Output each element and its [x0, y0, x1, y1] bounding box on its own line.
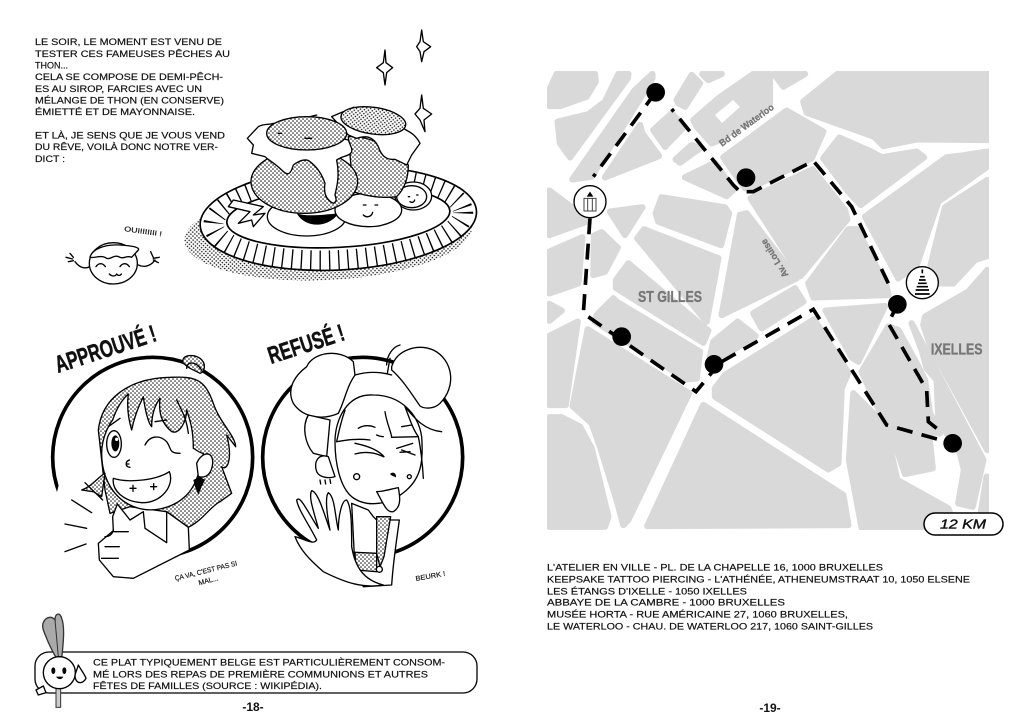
text block: intro: ES AU SIROP, FARCIES AVEC UN	[35, 84, 202, 94]
fringe line	[337, 437, 418, 442]
text block: addresses: KEEPSAKE TATTOO PIERCING - L'ATHÉNÉE, ATHENEUMSTRAAT 10, 1050 ELSENE	[547, 574, 970, 584]
white square building	[715, 100, 740, 123]
illustration: plate of stuffed peaches	[182, 30, 479, 287]
cucumber slices	[335, 182, 432, 227]
winking eye	[145, 437, 180, 453]
white gap for hand	[50, 480, 107, 560]
circle	[53, 357, 253, 557]
label: st gilles: ST GILLES	[638, 289, 702, 306]
text block: intro: DU RÊVE, VOILÀ DONC NOTRE VER-	[35, 142, 218, 152]
hair strands	[108, 400, 188, 433]
caption: ça va: MAL...	[198, 575, 219, 587]
icon: turnip mascot	[36, 614, 86, 707]
distance badge: 12 KM	[940, 516, 986, 532]
lower peach disc with black shadow	[267, 197, 346, 236]
text block: addresses	[547, 562, 970, 632]
side hair	[305, 415, 330, 457]
fingers	[102, 530, 128, 558]
callout: wikipedia note: CE PLAT TYPIQUEMENT BELGE EST PARTICULIÈREMENT CONSOM-	[93, 658, 445, 668]
text block: intro: LE SOIR, LE MOMENT EST VENU DE	[35, 37, 222, 47]
callout: wikipedia note: MÉ LORS DES REPAS DE PREMIÈRE COMMUNIONS ET AUTRES	[93, 670, 428, 680]
heading: refusé: REFUSÉ !	[264, 319, 348, 370]
suspender and shirt	[352, 503, 399, 587]
salad leaf	[228, 200, 265, 227]
text block: addresses: ABBAYE DE LA CAMBRE - 1000 BRUXELLES	[547, 598, 785, 608]
right peach	[332, 103, 420, 197]
neck and arm	[98, 504, 189, 578]
heading: approuvé: APPROUVÉ !	[51, 320, 160, 379]
text block: addresses: L'ATELIER EN VILLE - PL. DE LA CHAPELLE 16, 1000 BRUXELLES	[547, 562, 883, 572]
text block: addresses: LES ÉTANGS D'IXELLE - 1050 IXELLES	[547, 586, 747, 596]
small hair tuft	[82, 473, 105, 497]
face with bang spikes	[102, 394, 203, 510]
tongue	[377, 488, 400, 512]
icon: building marker	[574, 186, 606, 218]
map overlay	[574, 83, 982, 453]
caption: beurk: BEURK !	[415, 571, 446, 583]
map base blocks	[549, 73, 988, 528]
circle	[263, 357, 463, 557]
plate	[197, 159, 479, 277]
ear	[197, 454, 213, 477]
text block: intro: ET LÀ, JE SENS QUE JE VOUS VEND	[35, 130, 226, 140]
sparkles	[377, 30, 432, 132]
distance badge	[924, 513, 1003, 535]
left bun	[291, 353, 355, 417]
nose	[126, 460, 130, 467]
stop markers	[612, 83, 962, 453]
hair	[98, 377, 236, 527]
icon: tower marker	[906, 267, 938, 299]
map	[549, 73, 988, 528]
caption: ça va	[174, 560, 241, 592]
mascot: happy peach	[66, 243, 159, 284]
text block: intro: ÉMIETTÉ ET DE MAYONNAISE.	[35, 107, 195, 117]
label: ixelles: IXELLES	[931, 342, 982, 359]
face	[335, 395, 422, 504]
text block: intro: DICT :	[35, 154, 65, 164]
illustration: girl approving in circle	[50, 356, 253, 578]
open eye	[107, 431, 121, 457]
text block: addresses: MUSÉE HORTA - RUE AMÉRICAINE 27, 1060 BRUXELLES,	[547, 610, 848, 620]
right bun	[392, 347, 451, 408]
caption: oui: OUIIIIIIII !	[124, 226, 162, 238]
callout: wikipedia note: FÊTES DE FAMILLES (SOURCE : WIKIPÉDIA).	[93, 681, 322, 691]
text block: intro	[35, 37, 230, 164]
label: av louise: Av. Louise	[759, 237, 791, 279]
route	[583, 92, 953, 443]
illustration: girl refusing in circle	[263, 345, 463, 587]
callout: wikipedia note	[35, 652, 477, 693]
label: bd de waterloo: Bd de Waterloo	[717, 102, 776, 148]
text block: addresses: LE WATERLOO - CHAU. DE WATERLOO 217, 1060 SAINT-GILLES	[547, 622, 873, 632]
hair bun	[183, 356, 204, 373]
open mouth	[113, 472, 171, 503]
text block: intro: THON...	[35, 60, 68, 70]
caption: ça va: ÇA VA, C'EST PAS SI	[174, 560, 238, 583]
raised hand	[295, 491, 383, 586]
closed eyes	[355, 425, 415, 457]
text block: intro: MÉLANGE DE THON (EN CONSERVE)	[35, 96, 224, 106]
plate shadow	[182, 179, 475, 287]
star earring	[193, 477, 205, 495]
text block: intro: TESTER CES FAMEUSES PÊCHES AU	[35, 49, 230, 59]
page number 18: -18-	[242, 700, 264, 714]
left peach	[247, 115, 358, 213]
ear	[316, 456, 335, 478]
bangs and hair strands	[337, 407, 442, 478]
map labels	[638, 102, 982, 359]
text block: intro: CELA SE COMPOSE DE DEMI-PÊCH-	[35, 72, 223, 82]
motion lines	[65, 483, 103, 552]
page number 19: -19-	[759, 701, 781, 715]
nose, tear and piercing	[354, 473, 411, 480]
